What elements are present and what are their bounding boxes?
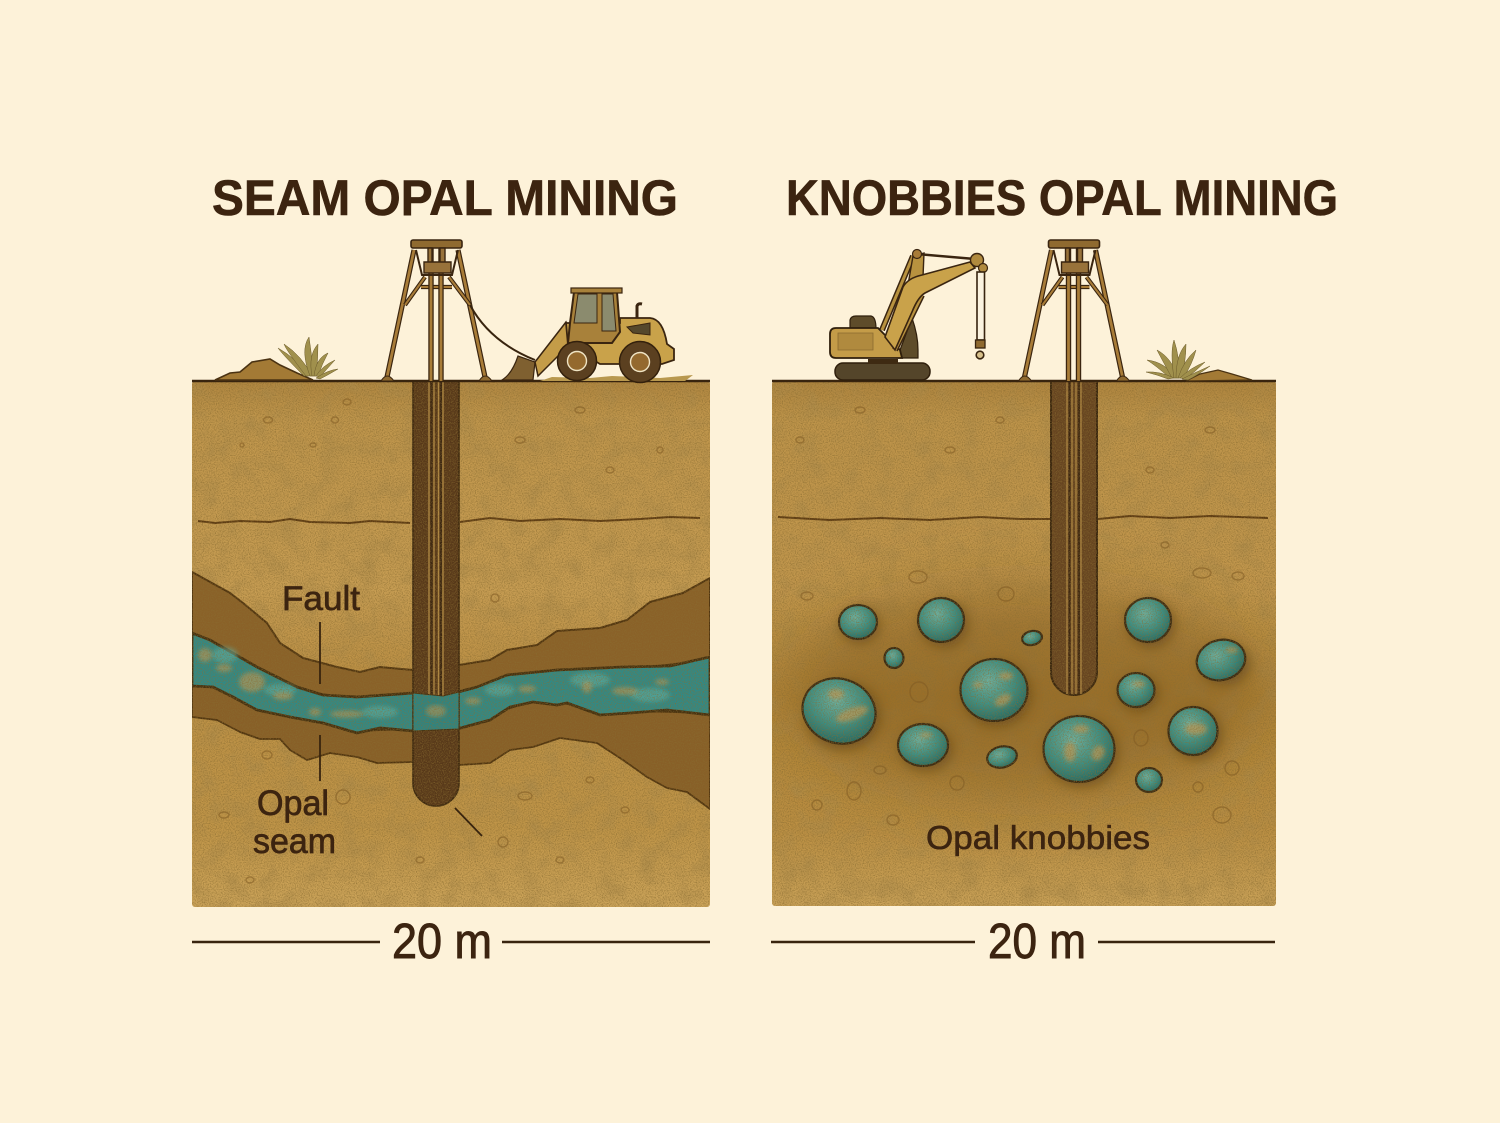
cab roof (571, 288, 622, 293)
strata line (198, 517, 700, 523)
knobbies shadows (806, 601, 1250, 787)
braces (405, 277, 470, 305)
panel: knobbies cross-section (772, 381, 1276, 906)
opal knobbies (793, 598, 1250, 792)
dark halo around knobbies (785, 585, 1265, 795)
rear counterweight (897, 318, 918, 358)
strata line (778, 516, 1268, 520)
mound and grass: right (1146, 340, 1252, 381)
body (566, 318, 674, 364)
mine shaft (413, 381, 459, 806)
headframe: right (1018, 240, 1130, 381)
label: fault (282, 580, 361, 684)
shaft poles (429, 381, 443, 696)
shaft pointer line (455, 808, 482, 836)
soil texture (192, 381, 710, 907)
lift arm (535, 322, 574, 376)
soil pebbles (219, 399, 663, 883)
soil block (192, 381, 710, 907)
excavator crane (830, 250, 988, 380)
body (830, 328, 902, 358)
poles (431, 248, 441, 381)
scale bar: left 20 m: 20 m (392, 915, 492, 969)
label: opal seam: seam (253, 822, 336, 861)
lower dark band (192, 684, 710, 809)
soil block (772, 381, 1276, 906)
fault leader line (319, 622, 321, 684)
shaft poles (1067, 381, 1081, 694)
fine grain overlay (772, 381, 1276, 906)
opal colour patches (828, 647, 1238, 763)
opal colour patches (198, 647, 670, 718)
label: opal knobbies: Opal knobbies (926, 819, 1150, 856)
struts (882, 256, 922, 350)
top beam (411, 240, 462, 248)
title: seam opal mining: SEAM OPAL MINING (212, 170, 678, 226)
hood (850, 316, 876, 329)
boom (885, 262, 975, 350)
tracks (835, 363, 930, 380)
platform (424, 248, 451, 273)
seam leader line (319, 735, 321, 781)
hanging cable (977, 272, 984, 340)
mound and grass: left (215, 337, 338, 380)
wheel loader (502, 288, 693, 382)
upper dark band (192, 572, 710, 700)
label: opal seam (253, 735, 336, 861)
wheels (558, 342, 660, 382)
ground scrub (540, 375, 693, 381)
ground surface lines (192, 380, 1276, 382)
bucket (502, 356, 535, 380)
fine grain overlay (192, 381, 710, 907)
headframe: left (381, 240, 492, 381)
soil pebbles (796, 407, 1244, 825)
cable (470, 305, 535, 360)
boom head (970, 254, 984, 266)
cab (568, 292, 620, 343)
opal seam (192, 633, 710, 733)
soil texture (772, 381, 1276, 906)
mine shaft (1051, 381, 1097, 695)
tie rod (917, 254, 975, 259)
exhaust (637, 304, 642, 318)
windows (574, 294, 597, 323)
label: fault: Fault (282, 580, 361, 618)
feet (381, 376, 492, 381)
panel: seam cross-section (192, 381, 710, 907)
hook (976, 340, 985, 348)
legs (387, 250, 485, 377)
seam through shaft (413, 692, 459, 731)
title: knobbies opal mining: KNOBBIES OPAL MINING (786, 170, 1338, 226)
scale bar: right 20 m: 20 m (988, 915, 1086, 969)
label: opal seam: Opal (257, 784, 329, 823)
